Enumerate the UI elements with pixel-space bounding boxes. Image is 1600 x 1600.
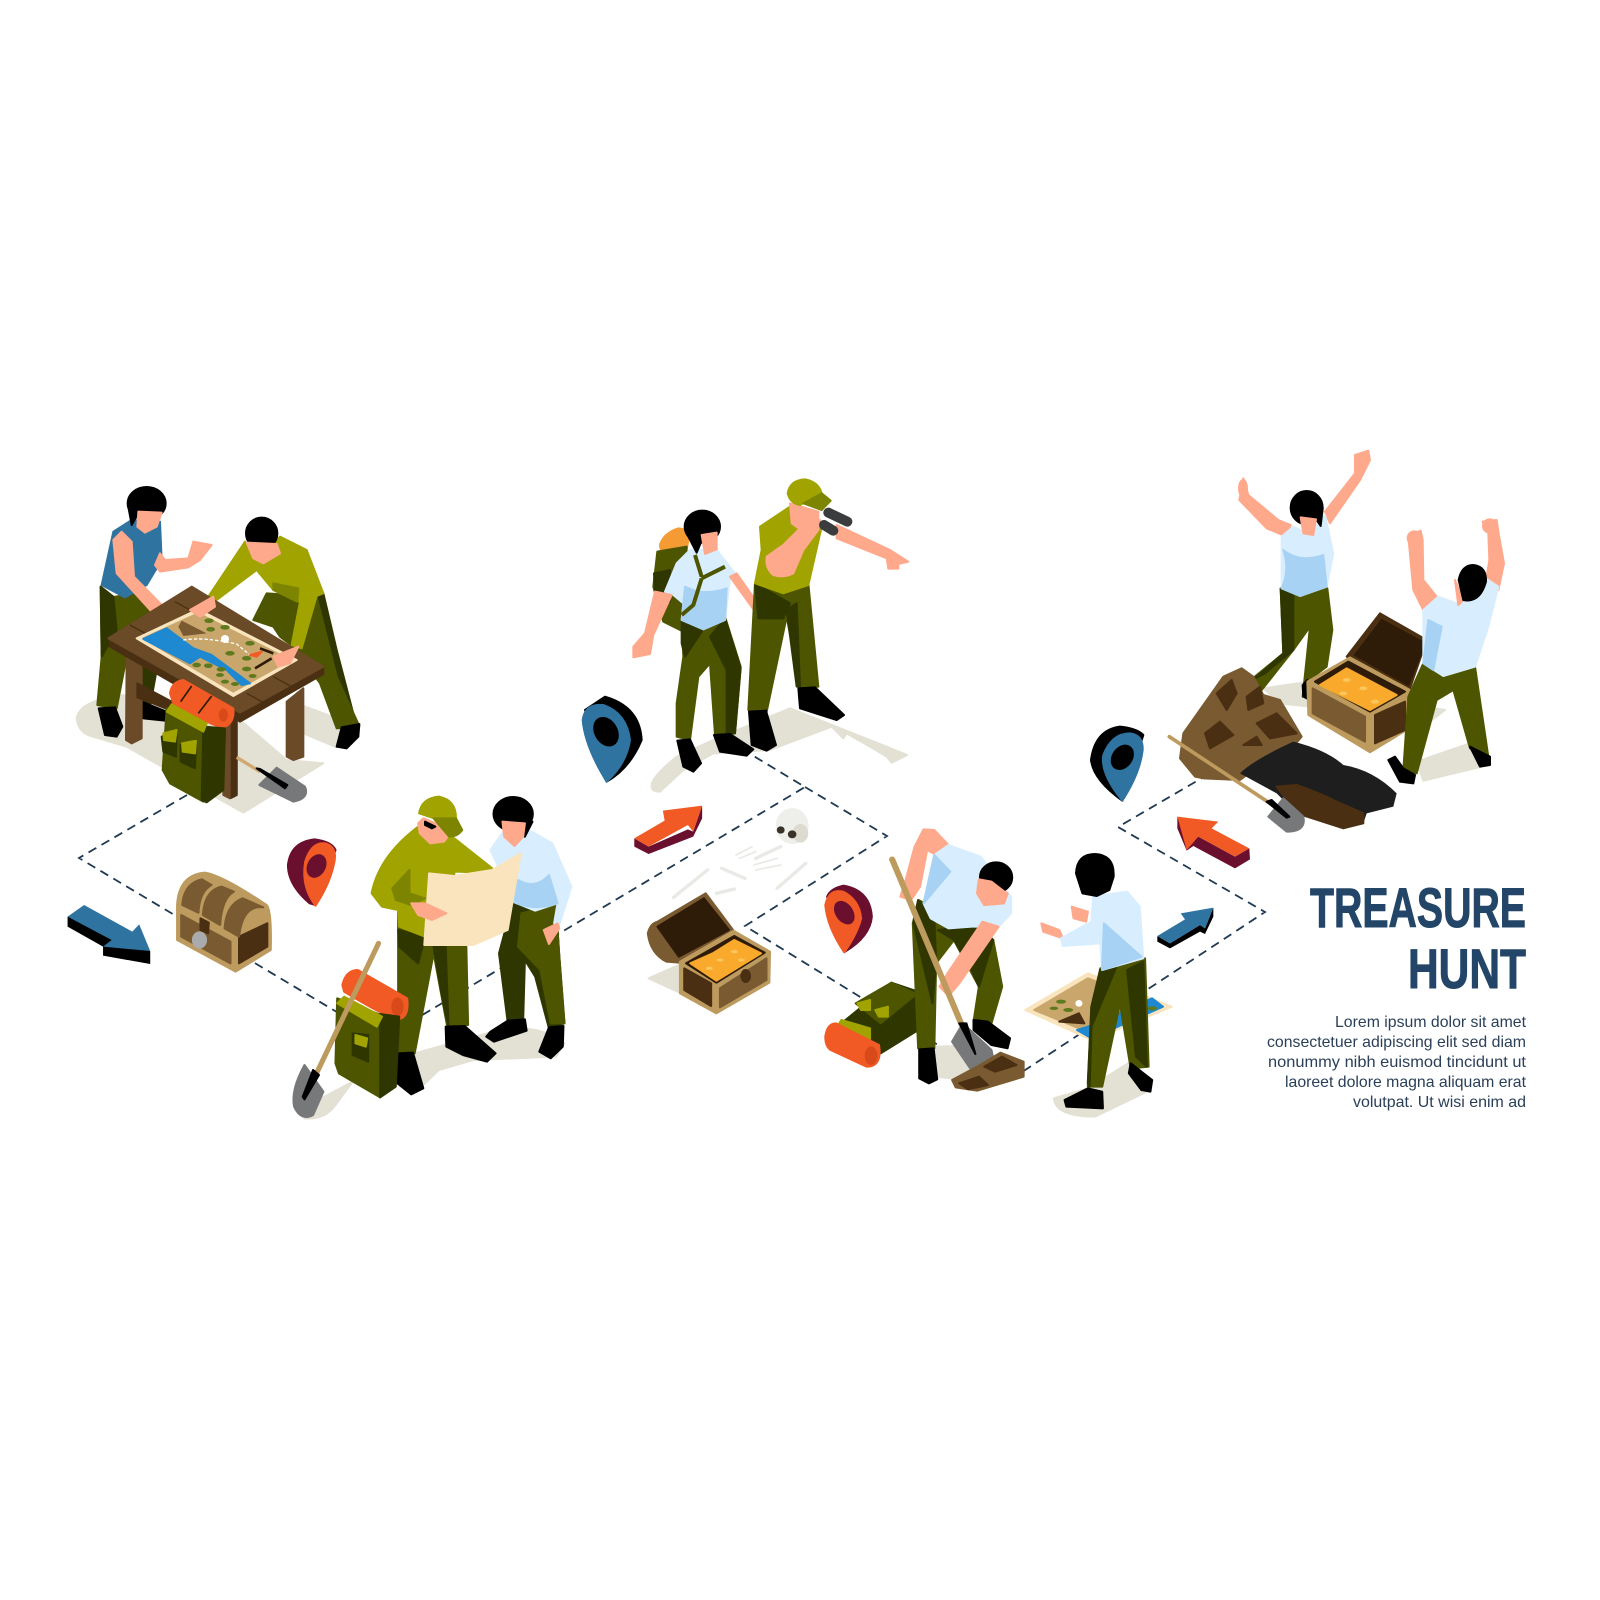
- map on ground: [1025, 973, 1172, 1040]
- table shadow: [77, 695, 343, 813]
- dirt mound and pit: [1169, 668, 1397, 832]
- man at table: [208, 518, 359, 748]
- scene: skeleton, open chest and digging: [634, 806, 1172, 1117]
- open chest with gold: [648, 893, 770, 1013]
- person seen from behind: [1041, 854, 1152, 1117]
- small shovel: [237, 757, 306, 802]
- table with legs: [108, 587, 323, 798]
- scene: scouts with binoculars: [583, 479, 908, 792]
- woman at table: [97, 487, 212, 737]
- description text: [1267, 1014, 1527, 1111]
- closed treasure chest: [177, 873, 271, 972]
- paper map held: [411, 853, 521, 945]
- dashed route line: [79, 755, 1265, 1078]
- man with binoculars: [748, 479, 908, 751]
- cheering man: [1388, 519, 1504, 783]
- woman with backpack: [633, 511, 774, 772]
- digging man: [892, 829, 1012, 1083]
- backpack and bedroll on ground: [825, 983, 918, 1067]
- finder shadows: [1263, 683, 1482, 781]
- description text: Lorem ipsum dolor sit amet: [1335, 1014, 1527, 1031]
- woman with blue-white shirt: [486, 797, 571, 1058]
- scene: couple planning at map table: [77, 487, 359, 813]
- ground shadow: [934, 1046, 977, 1078]
- man with olive cap: [372, 797, 496, 1094]
- direction arrow blue small: [1157, 908, 1213, 948]
- location pin blue: [1091, 727, 1143, 801]
- scouts shadow: [652, 708, 907, 792]
- description text: volutpat. Ut wisi enim ad: [1353, 1094, 1526, 1111]
- open chest of gold: [1307, 613, 1427, 752]
- description text: nonummy nibh euismod tincidunt ut: [1268, 1054, 1527, 1071]
- direction arrow blue: [68, 905, 150, 964]
- direction arrow orange-back: [1177, 817, 1250, 868]
- skeleton bones: [674, 808, 809, 897]
- scene: couple reading a map: [68, 797, 571, 1118]
- direction arrow orange: [634, 806, 702, 854]
- title: HUNT: [1408, 937, 1526, 1000]
- location pin orange: [825, 886, 872, 952]
- backpack, bedroll and leaning shovel: [293, 943, 408, 1117]
- description text: laoreet dolore magna aliquam erat: [1285, 1074, 1527, 1091]
- dirt pile: [952, 1053, 1024, 1091]
- description text: consectetuer adipiscing elit sed diam: [1267, 1034, 1526, 1051]
- treasure map on table: [137, 597, 298, 696]
- title: [1310, 876, 1526, 1000]
- jumping woman: [1239, 451, 1370, 700]
- backpack with bedroll: [162, 680, 234, 802]
- ground shadow: [304, 1028, 564, 1118]
- location pin red: [288, 839, 335, 906]
- location pin blue: [583, 697, 642, 782]
- scene: celebrating find: [1091, 451, 1504, 868]
